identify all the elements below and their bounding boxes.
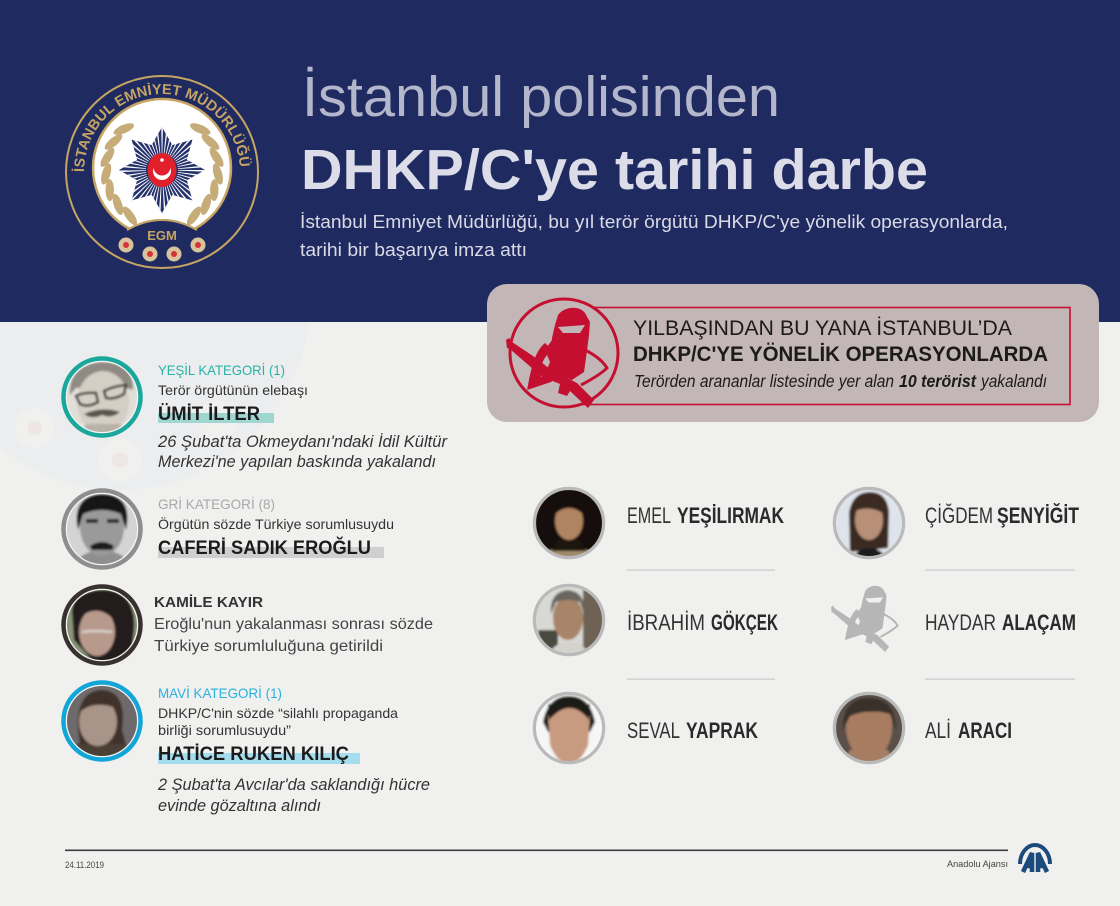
date: 24.11.2019 [65,860,104,870]
person: Haydar Alaçam: ALAÇAM [1002,610,1076,635]
capture note: 26 Şubat'ta Okmeydanı'ndaki İdil Kültür [157,432,448,451]
name: KAMİLE KAYIR [154,594,264,611]
person: İbrahim Gökçek: GÖKÇEK [711,610,778,635]
highlight bar [158,753,360,764]
person: Emel Yeşilırmak: YEŞİLIRMAK [677,503,784,528]
subtitle: tarihi bir başarıya imza attı [300,239,527,260]
panel: Hatice Ruken Kılıç [62,681,430,815]
person: İbrahim Gökçek [534,586,778,656]
EGM label: EGM [147,228,177,243]
panel: Ümit İlter [62,357,448,471]
capture note: 2 Şubat'ta Avcılar'da saklandığı hücre [157,775,430,794]
callout text [633,316,1048,391]
person: Ali Aracı: ARACI [958,718,1012,743]
name: HATİCE RUKEN KILIÇ [158,744,349,765]
category label: MAVİ KATEGORİ (1) [158,684,282,701]
callout text: 10 terörist [899,371,977,391]
person: Ali Aracı [834,694,1012,764]
highlight bar [158,547,384,558]
person: Emel Yeşilırmak [534,488,784,559]
person: Haydar Alaçam: HAYDAR [925,610,996,635]
source credit: Anadolu Ajansı [947,859,1008,870]
title [301,65,928,202]
panel: operations callout [487,284,1099,422]
person: Seval Yaprak: SEVAL [627,718,680,743]
name: ÜMİT İLTER [158,404,260,425]
role: Terör örgütünün elebaşı [158,382,308,398]
person: Çiğdem Şenyiğit: ÇİĞDEM [925,503,993,528]
name: CAFERİ SADIK EROĞLU [158,537,371,559]
person: Haydar Alaçam [831,586,1076,652]
callout text: yakalandı [980,371,1047,391]
title: İstanbul polisinden [302,65,780,129]
callout text: Terörden arananlar listesinde yer alan [634,371,894,391]
badge small stars [118,238,206,262]
callout text: YILBAŞINDAN BU YANA İSTANBUL’DA [633,316,1013,340]
subtitle: İstanbul Emniyet Müdürlüğü, bu yıl terör örgütü DHKP/C'ye yönelik operasyonlarda, [300,211,1008,232]
person: Çiğdem Şenyiğit [834,488,1079,559]
icon: masked militant in red circle [506,299,618,408]
capture note: Merkezi'ne yapılan baskında yakalandı [158,452,436,471]
laurel wreath [98,121,226,227]
person: Seval Yaprak [534,694,758,764]
icon: Anadolu Agency logo [1020,845,1050,872]
category label: GRİ KATEGORİ (8) [158,495,275,512]
person: Çiğdem Şenyiğit: ŞENYİĞİT [997,503,1079,528]
person: Emel Yeşilırmak: EMEL [627,503,671,528]
category label: YEŞİL KATEGORİ (1) [158,361,285,378]
portrait: Ümit İlter [62,357,142,437]
person: İbrahim Gökçek: İBRAHİM [627,610,705,635]
police star emblem [119,127,205,213]
portrait: Kamile Kayır [62,585,142,665]
faded badge watermark [0,110,310,490]
police badge logo [65,75,259,269]
title: DHKP/C'ye tarihi darbe [301,138,928,202]
header band [0,0,1120,322]
person: Seval Yaprak: YAPRAK [686,718,758,743]
divider row 2 [627,678,1075,680]
role: birliği sorumlusuydu” [158,722,291,738]
portrait: Hatice Ruken Kılıç [62,681,142,761]
capture note [157,432,448,471]
icon: masked militant silhouette [831,586,898,652]
capture note [157,775,430,815]
role note: Eroğlu'nun yakalanması sonrası sözde [154,616,433,633]
callout text: DHKP/C'YE YÖNELİK OPERASYONLARDA [633,341,1048,366]
portrait: Caferi Sadık Eroğlu [62,489,142,570]
role note: Türkiye sorumluluğuna getirildi [154,638,383,655]
role: Örgütün sözde Türkiye sorumlusuydu [158,515,394,532]
panel: Caferi Sadık Eroğlu [62,489,394,570]
role [158,705,398,738]
subtitle [300,211,1008,260]
highlight bar [158,413,274,423]
badge ring text: İSTANBUL EMNİYET MÜDÜRLÜĞÜ [72,82,252,172]
divider row 1 [627,570,1075,571]
footer rule [65,850,1008,851]
panel: Kamile Kayır [62,585,433,665]
role note [154,616,433,655]
capture note: evinde gözaltına alındı [158,796,321,815]
role: DHKP/C'nin sözde “silahlı propaganda [158,705,398,721]
person: Ali Aracı: ALİ [925,718,951,743]
